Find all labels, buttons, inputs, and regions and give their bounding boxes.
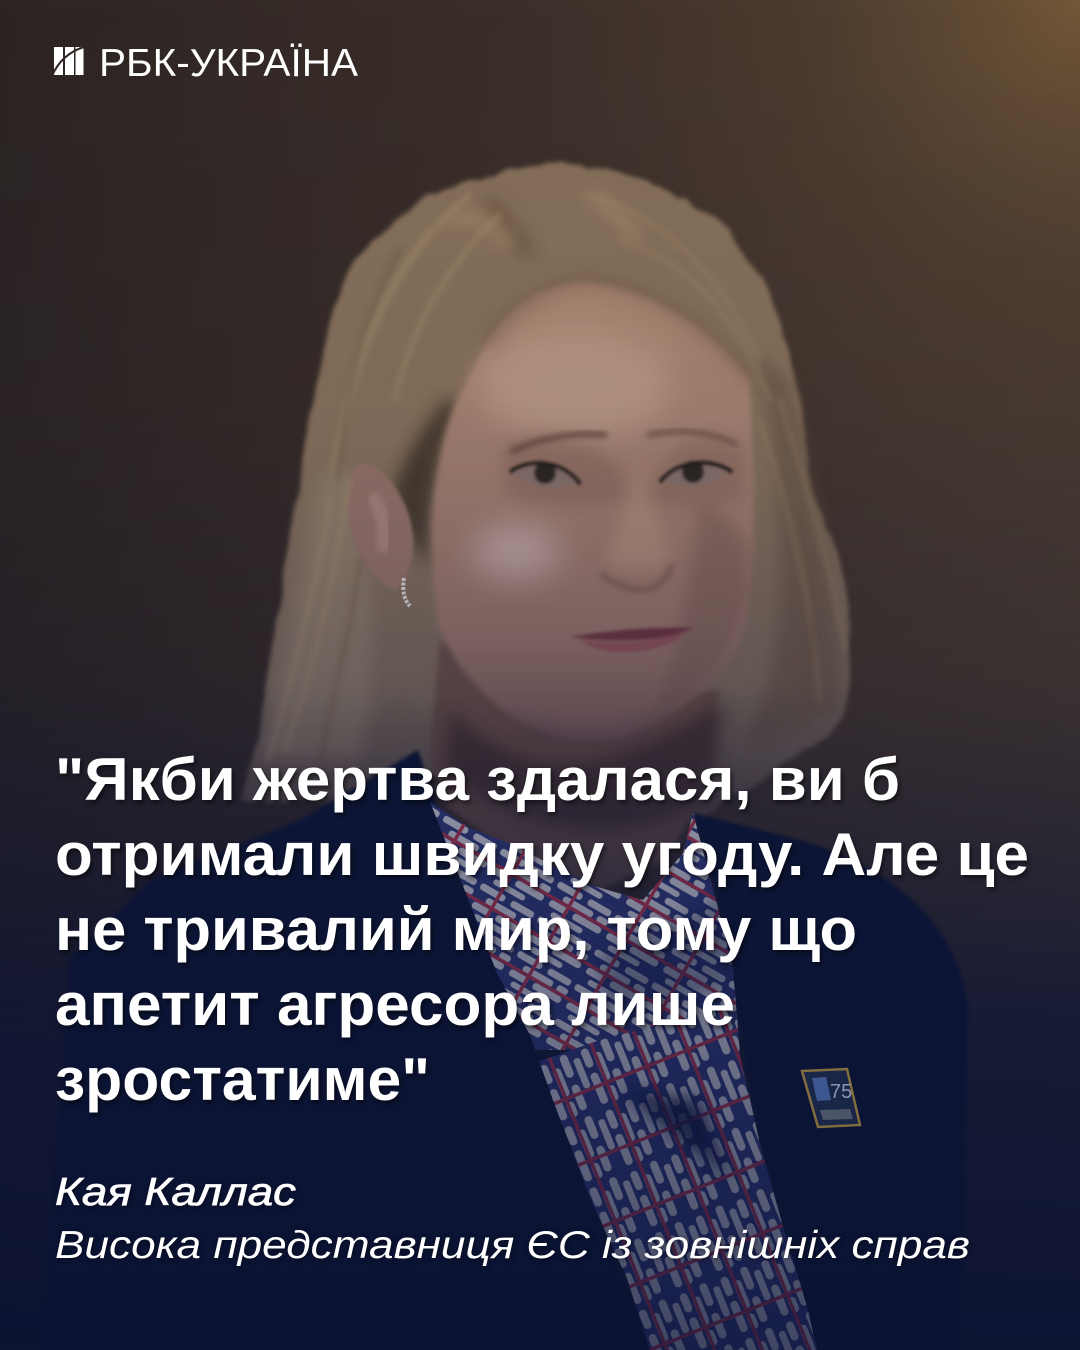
eye right — [660, 461, 732, 486]
hair strands — [268, 195, 845, 770]
attribution: name and position: Кая Каллас — [55, 1171, 297, 1214]
face — [432, 282, 754, 740]
quote text: апетит агресора лише — [55, 971, 735, 1038]
quote text: "Якби жертва здалася, ви б — [55, 746, 900, 813]
nose base — [602, 564, 672, 590]
attribution: name and position — [55, 1171, 970, 1267]
eyebrow left — [512, 434, 605, 451]
hairline shadow on forehead — [487, 282, 749, 380]
nose — [606, 480, 668, 570]
hair crown highlights — [445, 195, 640, 245]
cheek glow — [472, 524, 560, 580]
lips — [570, 628, 692, 652]
ear inner — [372, 495, 384, 552]
earring — [403, 578, 410, 606]
quote text: не тривалий мир, тому що — [55, 896, 857, 963]
jacket — [40, 750, 968, 1350]
hair back — [242, 164, 854, 820]
ear — [348, 464, 413, 590]
logo wordmark: РБК-УКРАЇНА — [99, 42, 358, 85]
eye socket shade — [505, 436, 745, 506]
jaw shadow — [480, 690, 680, 745]
hair right dark side — [745, 350, 842, 750]
hair lower left grey sheen — [262, 470, 372, 760]
scarf knot folds — [620, 1090, 730, 1180]
quote text: отримали швидку угоду. Але це — [55, 821, 1029, 888]
forehead highlight — [480, 330, 670, 440]
hair parting and crown — [487, 200, 530, 255]
neck — [430, 640, 720, 890]
icon: RBC logo mark — [52, 47, 84, 76]
NATO 75 pin: 75 — [830, 1081, 852, 1103]
photo: portrait of Kaja Kallas — [40, 164, 968, 1350]
neck shadow — [445, 700, 725, 829]
attribution: name and position: Висока представниця ЄС із зовнішніх справ — [55, 1224, 970, 1267]
eyebrow right — [649, 432, 736, 444]
quote text: зростатиме" — [55, 1046, 430, 1113]
patterned scarf — [430, 802, 817, 1350]
NATO 75 pin — [802, 1069, 860, 1127]
eye left — [510, 462, 580, 488]
quote text — [55, 746, 1029, 1113]
face shading right — [650, 500, 751, 730]
dark hollow beside face — [392, 400, 460, 565]
logo: РБК-Україна — [52, 42, 358, 85]
